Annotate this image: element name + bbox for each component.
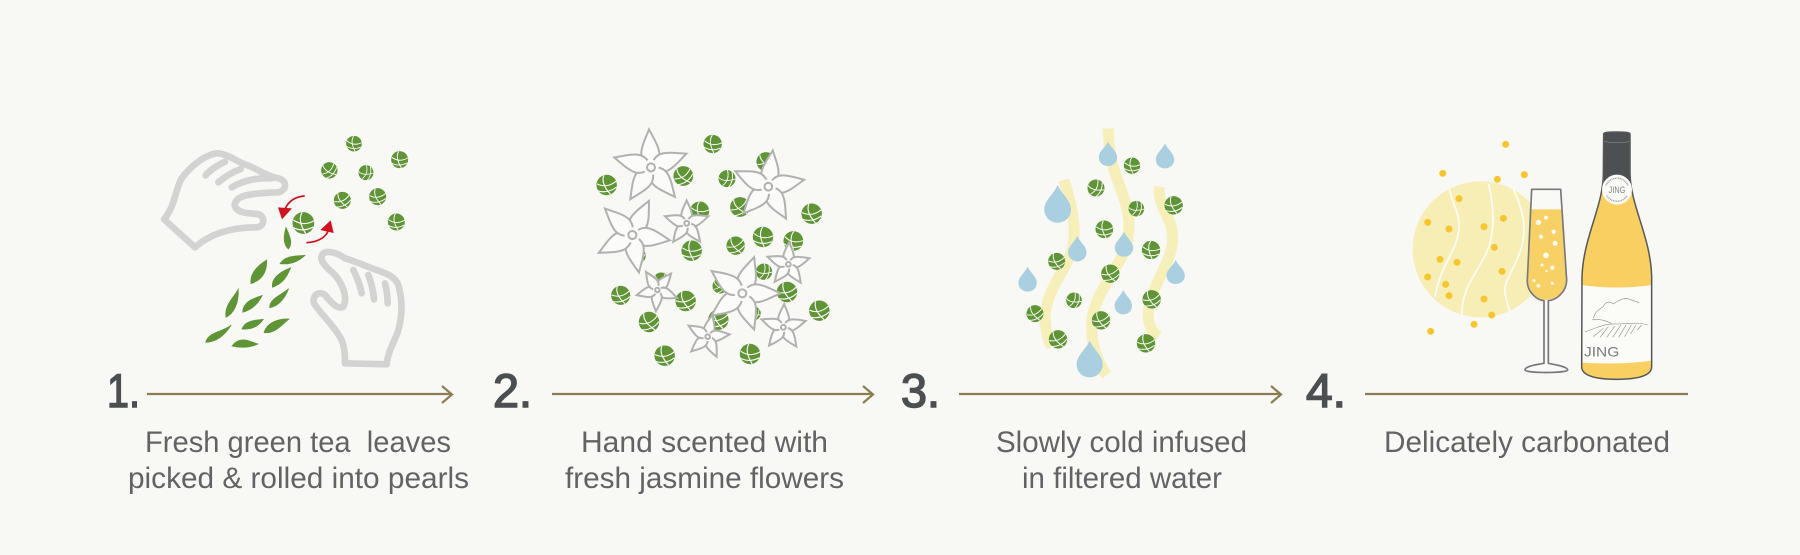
step 4 caption: Delicately carbonated <box>1384 426 1670 459</box>
step 1 caption <box>128 426 469 495</box>
step 3 caption: Slowly cold infused <box>996 426 1247 459</box>
icon: red rotation arrows <box>278 196 334 243</box>
step 1 caption: picked & rolled into pearls <box>128 462 469 495</box>
step 3 caption: in filtered water <box>1022 462 1222 495</box>
label mountain drawing <box>1585 298 1648 337</box>
step 1 number: 1. <box>107 364 140 417</box>
icon: champagne flute <box>1525 189 1568 372</box>
step 1 arrow <box>147 386 452 403</box>
illustration: jasmine flowers and pearls <box>582 127 831 367</box>
icon: yellow dots <box>1424 141 1528 335</box>
icon: JING bottle <box>1582 132 1652 379</box>
label medallion <box>1602 175 1632 205</box>
icon: pearls <box>1024 156 1184 353</box>
step 1 caption: Fresh green tea leaves <box>145 426 451 459</box>
step 2 caption <box>565 426 844 495</box>
icon: bubble circle <box>1413 181 1549 317</box>
icon: water drops <box>1018 142 1185 377</box>
step 3 caption <box>996 426 1247 495</box>
icon: tea pearls <box>292 135 409 235</box>
step 2 caption: fresh jasmine flowers <box>565 462 844 495</box>
step 4 number: 4. <box>1306 364 1346 417</box>
icon: infusion waves <box>1045 128 1173 375</box>
step 4 line <box>1365 393 1688 395</box>
icon: tea leaves <box>206 227 305 347</box>
step 2 number: 2. <box>493 364 532 417</box>
icon: right hand <box>314 252 401 364</box>
icon: pearls <box>596 133 831 367</box>
label medallion: JING <box>1609 185 1625 195</box>
illustration: hands rolling tea leaves into pearls <box>164 135 409 364</box>
icon: left hand <box>164 153 285 247</box>
step 3 arrow <box>959 386 1281 403</box>
step 2 caption: Hand scented with <box>581 426 828 459</box>
illustration: cold infusion <box>1018 128 1185 377</box>
illustration: carbonated glass and bottle <box>1413 132 1652 379</box>
icon: jasmine flowers <box>582 127 812 362</box>
step 3 number: 3. <box>901 364 940 417</box>
label wordmark: JING <box>1584 343 1619 359</box>
step 2 arrow <box>552 386 873 403</box>
